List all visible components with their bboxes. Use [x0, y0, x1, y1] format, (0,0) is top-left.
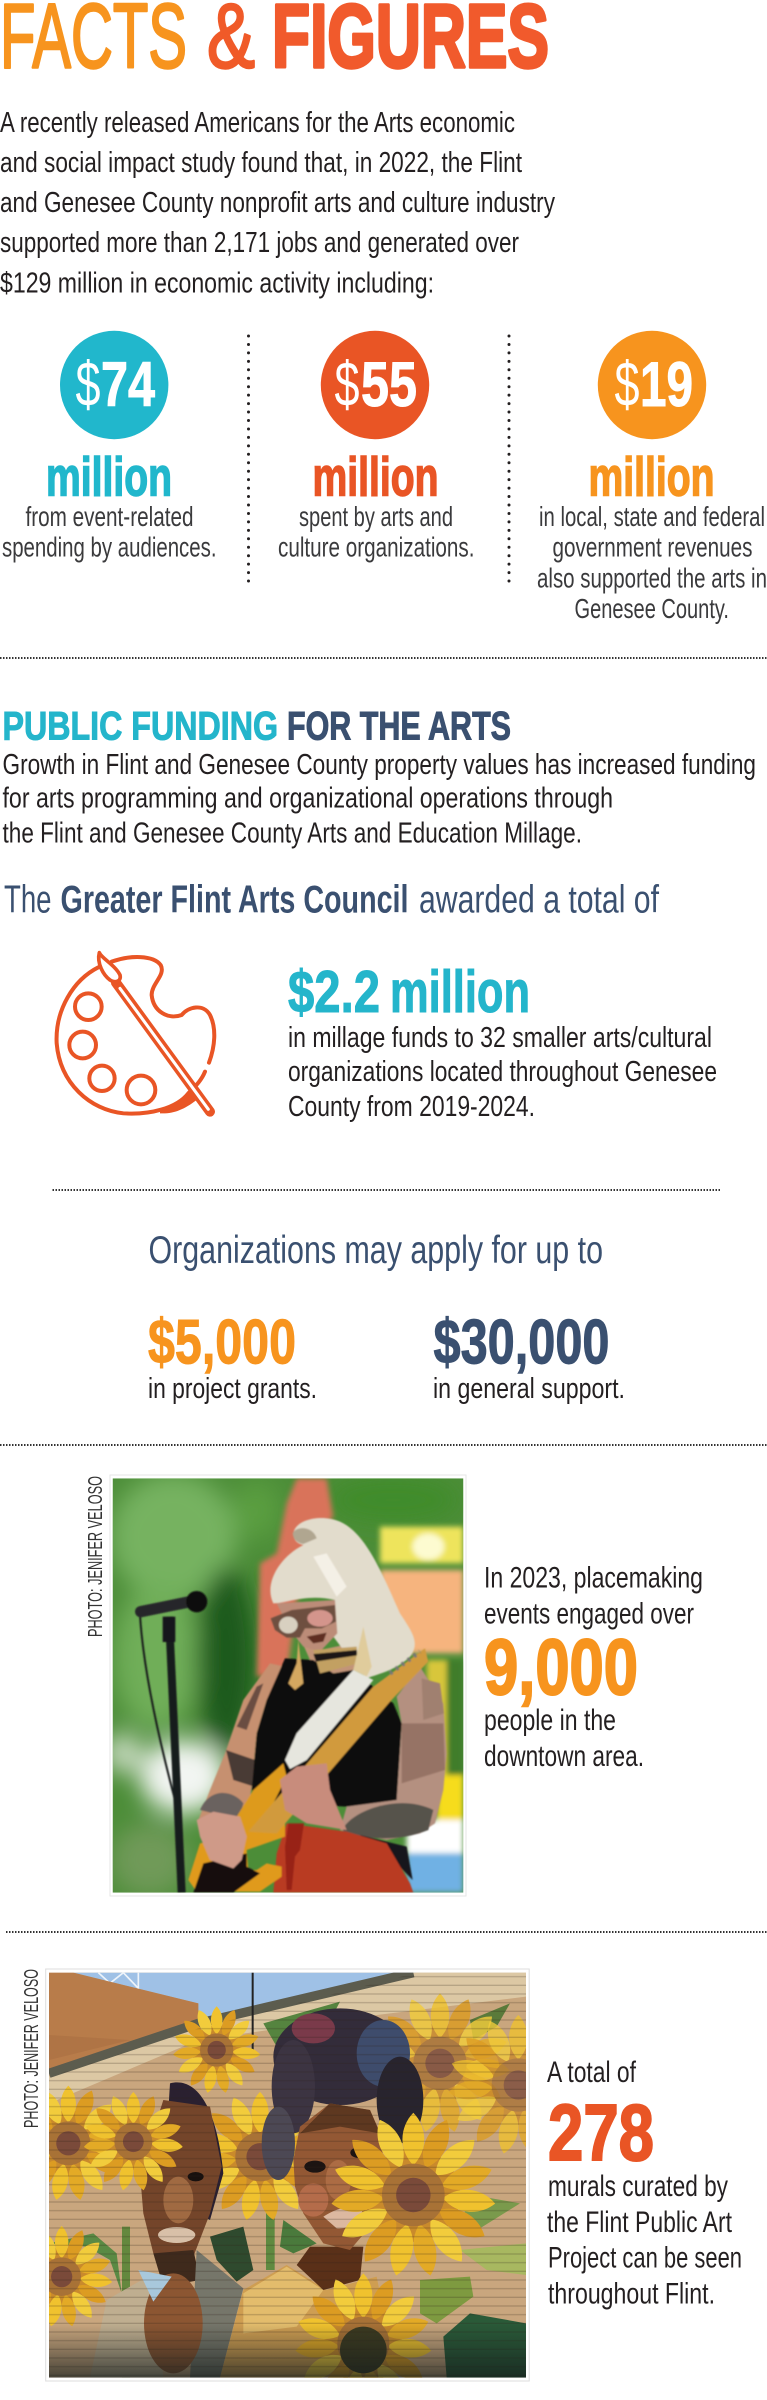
left arm — [198, 1663, 285, 1867]
subheading: arts council award: The — [4, 878, 52, 922]
panel: $19 million stat — [537, 331, 767, 624]
heading: public funding for the arts: FOR THE ARTS — [287, 704, 511, 748]
intro text block: and social impact study found that, in 2022, the Flint — [0, 147, 522, 179]
intro text block: and Genesee County nonprofit arts and culture industry — [0, 187, 556, 219]
stat: $30,000 general support — [433, 1308, 625, 1405]
heading: public funding for the arts: PUBLIC FUNDING — [2, 704, 278, 748]
photo: sunflower mural — [45, 1968, 530, 2382]
icon: orange circle $19 — [598, 331, 706, 439]
mic and stand — [140, 1591, 207, 1893]
intro text block: A recently released Americans for the Arts economic — [0, 107, 515, 139]
text block: millage funds — [288, 1022, 717, 1123]
text block: murals — [547, 2056, 742, 2310]
guitar neck — [248, 1648, 428, 1833]
description: from event-related — [26, 501, 194, 532]
heading: public funding for the arts — [2, 704, 511, 748]
text block: placemaking events: downtown area. — [484, 1740, 644, 1773]
stat: $5,000 project grants: $5,000 — [148, 1308, 296, 1378]
guitar body — [237, 1763, 287, 1837]
text block: placemaking events — [484, 1562, 703, 1773]
intro text block — [0, 107, 556, 300]
text block: placemaking events: In 2023, placemaking — [484, 1562, 703, 1594]
hands — [280, 1763, 347, 1830]
background sunflowers — [388, 1994, 510, 2132]
necklace — [313, 1647, 358, 1673]
icon: paint palette and brush — [57, 953, 214, 1114]
photo credit: guitarist: PHOTO: JENIFER VELOSO — [85, 1476, 107, 1637]
description: culture organizations. — [278, 532, 474, 563]
text block: millage funds: County from 2019-2024. — [288, 1091, 535, 1123]
description: spent by arts and — [299, 501, 453, 532]
description: spending by audiences. — [2, 532, 216, 563]
million label: million — [46, 446, 172, 508]
description — [537, 501, 767, 624]
subheading: arts council award: awarded a total of — [419, 878, 659, 922]
text block: placemaking events: people in the — [484, 1704, 616, 1737]
description — [2, 501, 216, 563]
text block: placemaking events: events engaged over — [484, 1598, 694, 1630]
brick lines and shade — [49, 1973, 526, 2378]
panel: $55 million stat — [278, 331, 474, 563]
text block: public funding description — [2, 749, 756, 850]
text block: murals: A total of — [547, 2056, 637, 2089]
subheading: organizations may apply: Organizations may apply for up to — [148, 1229, 603, 1272]
description — [278, 501, 474, 563]
icon: red-orange circle $55: 55 — [361, 350, 417, 420]
right arm — [340, 1667, 447, 1840]
stat: $5,000 project grants — [148, 1308, 317, 1405]
face — [277, 1600, 337, 1652]
icon: red-orange circle $55 — [321, 331, 429, 439]
subheading: arts council award: Greater Flint Arts Council — [60, 878, 408, 922]
text block: murals: throughout Flint. — [548, 2278, 715, 2310]
neck — [304, 1645, 356, 1674]
intro text block: supported more than 2,171 jobs and generated over — [0, 227, 519, 259]
brown building — [49, 1973, 198, 2070]
icon: teal circle $74: $ — [76, 350, 100, 420]
text block: public funding description: the Flint and Genesee County Arts and Education Millage. — [2, 818, 582, 850]
title — [0, 0, 549, 88]
icon: orange circle $19: $ — [614, 350, 640, 420]
stat: $30,000 general support: $30,000 — [434, 1308, 610, 1378]
stat: 278: 278 — [548, 2088, 654, 2177]
icon: red-orange circle $55: $ — [334, 350, 360, 420]
million label: million — [588, 446, 714, 508]
sky — [74, 1972, 416, 2016]
leaves and stems — [49, 2002, 526, 2378]
stat: $2.2 million — [288, 959, 530, 1025]
stat: $5,000 project grants: in project grants. — [148, 1373, 317, 1405]
icon: orange circle $19: 19 — [640, 350, 693, 420]
black top — [252, 1658, 402, 1807]
icon: teal circle $74 — [60, 331, 168, 439]
text block: public funding description: for arts programming and organizational operations through — [2, 782, 613, 814]
hair — [270, 1518, 415, 1678]
stat: $2.2 million: million — [390, 959, 530, 1025]
panel: $74 million stat — [2, 331, 216, 563]
photo credit: mural: PHOTO: JENIFER VELOSO — [21, 1969, 43, 2128]
pants — [273, 1823, 413, 1893]
brick wall top — [49, 1973, 526, 2103]
photo: guitarist performing — [103, 1473, 466, 1897]
million label: million — [312, 446, 438, 508]
icon: teal circle $74: 74 — [101, 350, 155, 420]
stat: 9,000: 9,000 — [484, 1622, 638, 1711]
strap — [285, 1670, 373, 1769]
boy — [90, 2082, 243, 2378]
stat: $30,000 general support: in general support. — [433, 1373, 625, 1405]
girl — [220, 2008, 423, 2378]
stat: $2.2 million: $2.2 — [288, 959, 380, 1025]
intro text block: $129 million in economic activity including: — [0, 268, 434, 300]
